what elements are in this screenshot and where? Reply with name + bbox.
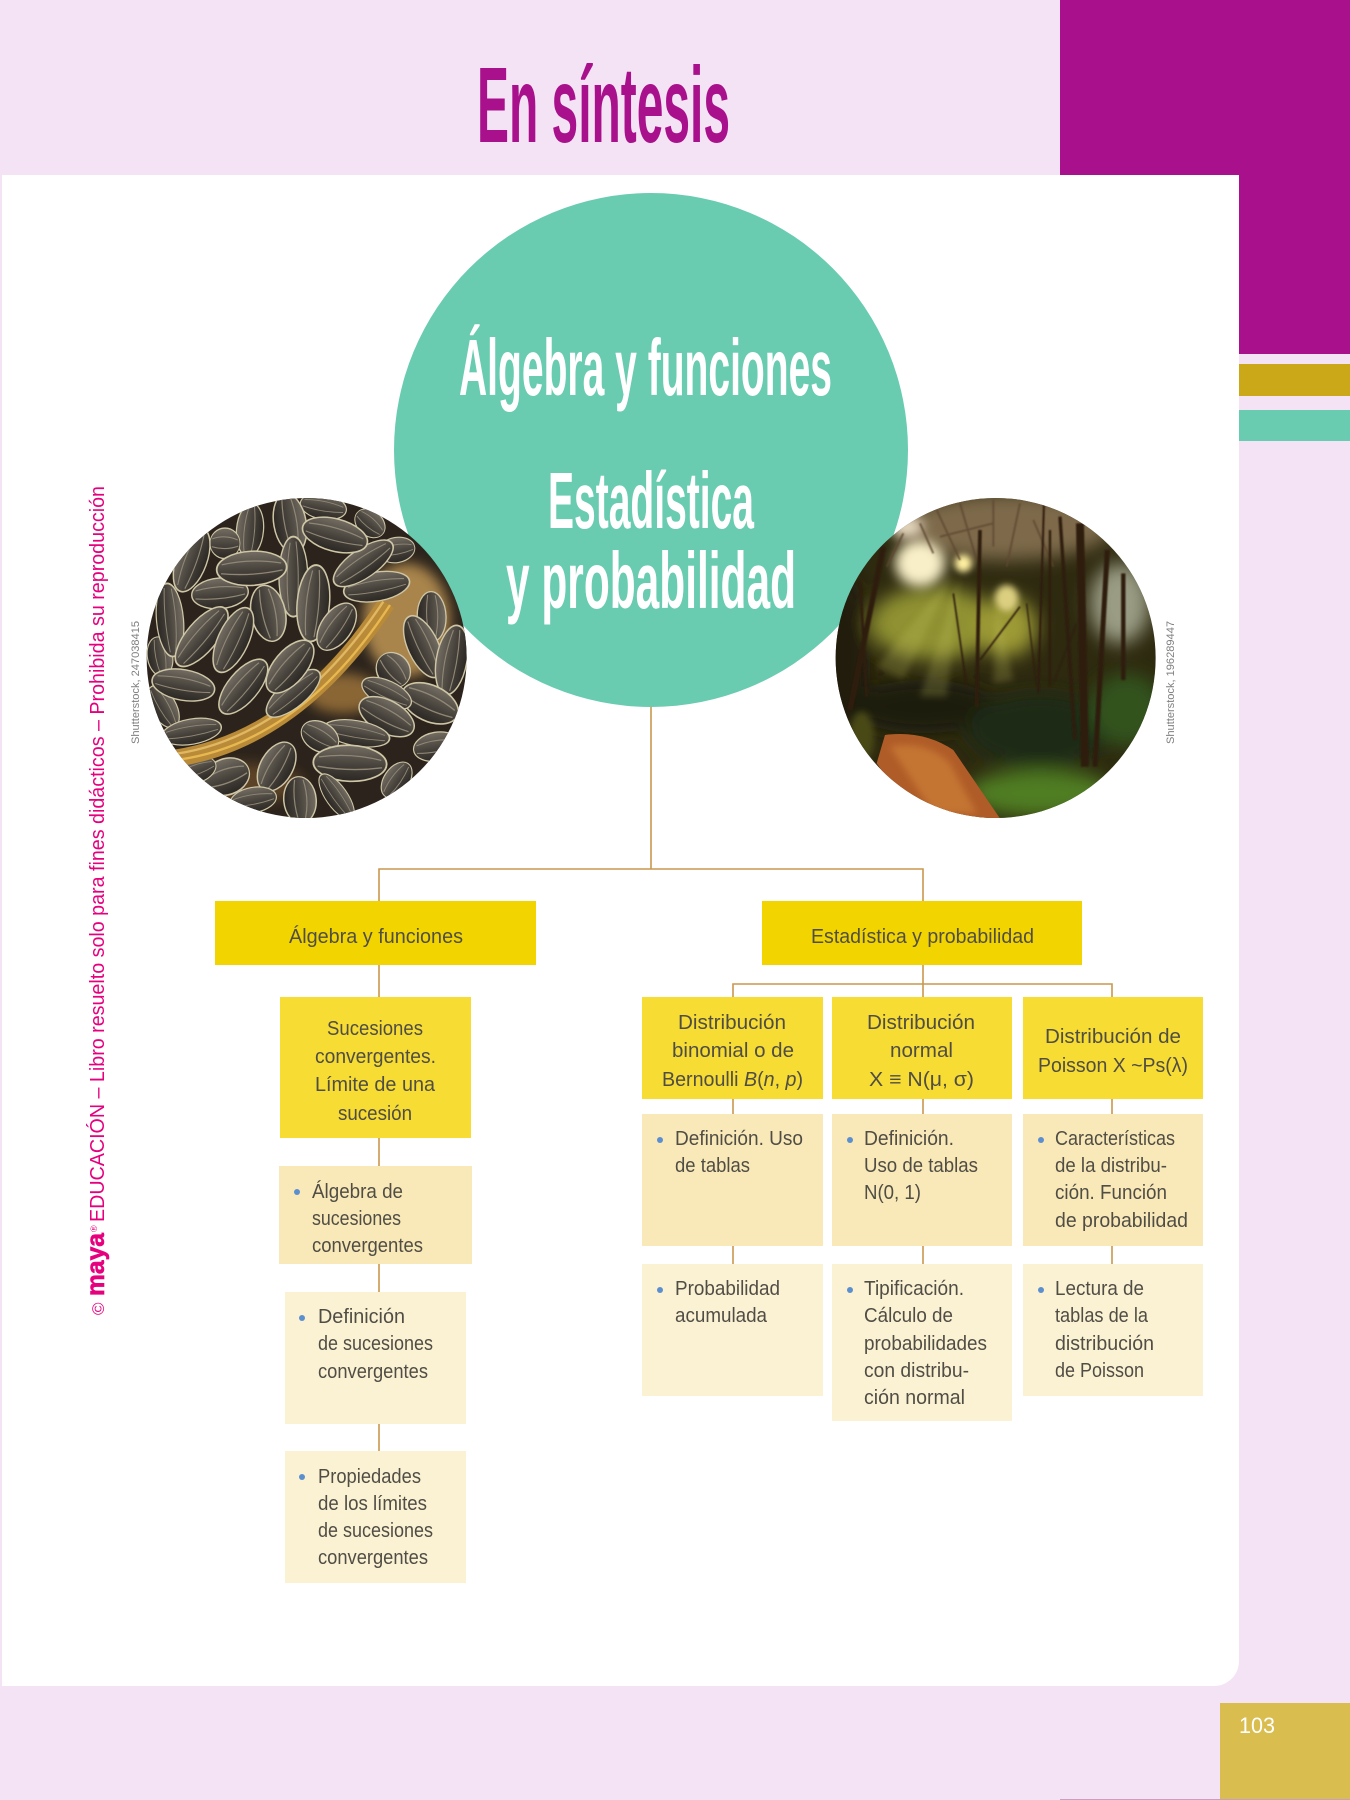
item: properties of limits: Propiedades [318, 1466, 421, 1488]
item: definition, tables (binomial) [642, 1114, 823, 1246]
item: reading Poisson tables [1023, 1264, 1203, 1396]
circle heading: probability: y probabilidad [506, 536, 796, 625]
topic box: convergent sequences: sucesión [338, 1103, 412, 1125]
item: definition, tables (binomial): Definición. Uso [675, 1128, 803, 1150]
item: definition of sequences: Definición [318, 1306, 405, 1328]
item: definition of sequences [285, 1292, 466, 1424]
item: cumulative probability: acumulada [675, 1305, 768, 1327]
topic box: binomial distribution: Distribución [678, 1012, 786, 1034]
vertical copyright note: ® [89, 1225, 99, 1232]
topic box: binomial distribution [642, 997, 823, 1099]
central teal circle: Álgebra y funciones [459, 323, 832, 412]
gold side tab [1239, 364, 1350, 396]
item: properties of limits: de sucesiones [318, 1520, 433, 1542]
branch box: statistics: Estadística y probabilidad [811, 926, 1034, 948]
vertical copyright note: © [89, 1302, 108, 1315]
item: algebra of sequences [279, 1166, 472, 1264]
topic box: normal distribution: Distribución [867, 1012, 975, 1034]
topic box: convergent sequences: Límite de una [315, 1074, 436, 1096]
topic box: normal distribution [832, 997, 1012, 1099]
topic box: Poisson distribution: Distribución de [1045, 1026, 1181, 1048]
item: reading Poisson tables: distribución [1055, 1333, 1154, 1355]
item: standardisation [832, 1264, 1012, 1421]
branch box: algebra [215, 901, 536, 965]
item: properties of limits [285, 1451, 466, 1583]
item: standardisation: Cálculo de [864, 1305, 953, 1327]
branch box: algebra: Álgebra y funciones [289, 925, 463, 948]
teal side tab [1239, 410, 1350, 441]
item: reading Poisson tables: tablas de la [1055, 1305, 1149, 1327]
item: definition, tables (binomial): de tablas [675, 1155, 750, 1177]
item: reading Poisson tables: de Poisson [1055, 1360, 1144, 1382]
photo: forest path with sun rays [836, 498, 1156, 818]
topic box: binomial distribution: Bernoulli B(n, p) [662, 1069, 803, 1091]
item: characteristics (Poisson): de la distribu- [1055, 1155, 1167, 1177]
text: En síntesis [477, 44, 730, 165]
item: definition, tables (normal) [832, 1114, 1012, 1246]
purple corner block [1060, 0, 1350, 354]
topic box: Poisson distribution [1023, 997, 1203, 1099]
item: algebra of sequences: Álgebra de [312, 1180, 403, 1203]
page number tab: 103 [1239, 1713, 1275, 1738]
item: characteristics (Poisson): ción. Función [1055, 1182, 1167, 1204]
white content panel [2, 175, 1239, 1686]
photo: sunflower seeds in basket [141, 490, 473, 825]
item: standardisation: probabilidades [864, 1333, 987, 1355]
item: cumulative probability [642, 1264, 823, 1396]
photo credit right: Shutterstock, 196289447 [1165, 621, 1177, 744]
topic box: normal distribution: normal [890, 1040, 953, 1062]
item: reading Poisson tables: Lectura de [1055, 1278, 1144, 1300]
item: definition of sequences: convergentes [318, 1361, 428, 1383]
item: definition of sequences: de sucesiones [318, 1333, 433, 1355]
item: algebra of sequences: sucesiones [312, 1208, 401, 1230]
topic box: binomial distribution: binomial o de [672, 1040, 794, 1062]
item: characteristics (Poisson): de probabilidad [1055, 1210, 1188, 1232]
item: definition, tables (normal): Uso de tablas [864, 1155, 978, 1177]
connector lines [379, 707, 1112, 1451]
central teal circle: Estadística [548, 456, 754, 545]
item: definition, tables (normal): Definición. [864, 1128, 954, 1150]
item: cumulative probability: Probabilidad [675, 1278, 780, 1300]
item: characteristics (Poisson): Características [1055, 1128, 1175, 1150]
vertical copyright note: EDUCACIÓN – Libro resuelto solo para fines didácticos – Prohibida su reproducción [86, 486, 109, 1222]
item: properties of limits: de los límites [318, 1493, 427, 1515]
vertical copyright note [82, 486, 110, 1315]
item: standardisation: con distribu- [864, 1360, 969, 1382]
page number tab [1220, 1703, 1350, 1800]
item: definition, tables (normal): N(0, 1) [864, 1182, 921, 1204]
topic box: normal distribution: X ≡ N(μ, σ) [869, 1069, 974, 1091]
item: standardisation: ción normal [864, 1387, 965, 1409]
vertical copyright note: maya [82, 1232, 110, 1296]
item: characteristics (Poisson) [1023, 1114, 1203, 1246]
item: algebra of sequences: convergentes [312, 1235, 423, 1257]
branch box: statistics [762, 901, 1082, 965]
central teal circle [394, 193, 908, 707]
topic box: Poisson distribution: Poisson X ~Ps(λ) [1038, 1055, 1188, 1077]
topic box: convergent sequences [280, 997, 471, 1138]
item: standardisation: Tipificación. [864, 1278, 964, 1300]
bottom edge strip [1060, 1799, 1350, 1800]
topic box: convergent sequences: convergentes. [315, 1046, 436, 1068]
item: properties of limits: convergentes [318, 1547, 428, 1569]
topic box: convergent sequences: Sucesiones [327, 1018, 423, 1040]
photo credit left: Shutterstock, 247038415 [130, 621, 142, 744]
